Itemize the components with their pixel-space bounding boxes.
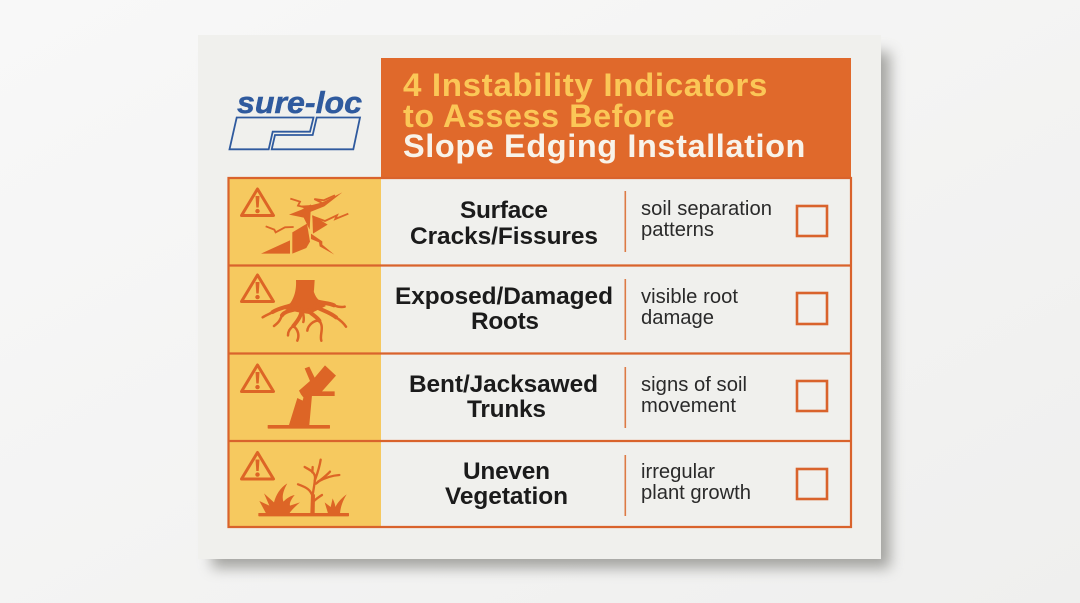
title: Slope Edging Installation (403, 128, 806, 164)
card (198, 35, 881, 559)
title (403, 67, 806, 164)
description: movement (641, 395, 736, 417)
title: 4 Instability Indicators (403, 67, 768, 103)
description (641, 198, 772, 241)
icon: ground crack (261, 192, 348, 255)
logo: sure-loc (230, 85, 362, 149)
description: damage (641, 307, 714, 329)
card shadow (212, 52, 890, 568)
checkbox (797, 381, 827, 411)
heading: Trunks (467, 396, 546, 423)
description (641, 461, 751, 504)
heading: Roots (471, 308, 539, 335)
heading: Surface (460, 197, 548, 224)
heading (410, 197, 598, 250)
checkbox (797, 469, 827, 499)
heading (409, 371, 598, 423)
description (641, 374, 747, 417)
heading: Vegetation (445, 483, 568, 510)
checkbox (797, 293, 827, 324)
description: signs of soil (641, 374, 747, 396)
heading (395, 283, 613, 335)
row 1: surface cracks (242, 189, 827, 255)
row 3: bent trunks (242, 365, 827, 429)
description: patterns (641, 219, 714, 241)
icon: warning (242, 365, 274, 392)
table grid (228, 178, 851, 527)
yellow icon column (229, 178, 381, 527)
heading: Cracks/Fissures (410, 223, 598, 250)
row 2: exposed roots (242, 275, 827, 341)
logo: sure-loc: sure-loc (237, 85, 362, 120)
heading (445, 458, 568, 510)
icon: warning (242, 275, 274, 302)
icon: warning (242, 452, 274, 479)
heading: Uneven (463, 458, 550, 485)
icon: warning (242, 189, 274, 216)
description (641, 286, 738, 329)
header panel (381, 58, 851, 178)
description: soil separation (641, 198, 772, 220)
icon: roots (263, 280, 346, 341)
title: to Assess Before (403, 98, 675, 134)
description: plant growth (641, 482, 751, 504)
checkbox (797, 206, 827, 236)
heading: Bent/Jacksawed (409, 371, 598, 398)
icon: vegetation (258, 460, 349, 516)
description: irregular (641, 461, 715, 483)
heading: Exposed/Damaged (395, 283, 613, 310)
description: visible root (641, 286, 738, 308)
icon: bent trunk (268, 365, 336, 429)
row 4: uneven vegetation (242, 452, 827, 516)
